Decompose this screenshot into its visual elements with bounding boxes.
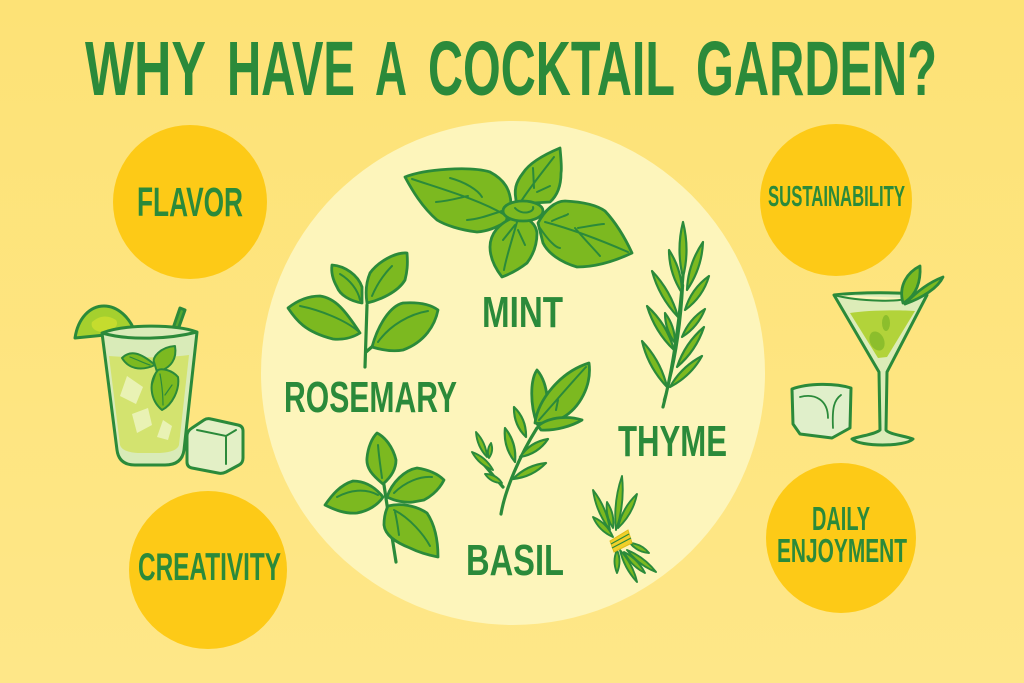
glass (102, 326, 197, 465)
title: WHY (85, 26, 206, 112)
icon: centre herb sprig (472, 363, 589, 514)
badge: sustainability (760, 124, 912, 276)
icon: rosemary sprig (642, 222, 709, 407)
title (85, 26, 937, 112)
badge: daily enjoyment: ENJOYMENT (777, 532, 907, 569)
badge: sustainability: SUSTAINABILITY (768, 181, 905, 213)
label: rosemary: ROSEMARY (284, 373, 457, 422)
icon: tied herb bundle (593, 476, 656, 582)
title: A (375, 26, 407, 112)
panel: central herb circle (261, 121, 765, 625)
badge: daily enjoyment: DAILY (812, 500, 870, 537)
icon: mint sprig (405, 148, 632, 277)
lime wedge (75, 306, 135, 338)
label: thyme: THYME (618, 417, 727, 466)
icon: mojito glass with lime and ice (75, 306, 243, 473)
glass rim (102, 332, 197, 338)
ice cube (792, 384, 851, 438)
icon: rosemary-labelled herb (288, 253, 438, 367)
label: mint: MINT (482, 288, 563, 337)
martini liquid (850, 310, 915, 358)
title: COCKTAIL (428, 26, 675, 112)
straw (170, 308, 185, 338)
garnish leaves (902, 266, 920, 303)
liquid (109, 355, 189, 453)
badge: creativity: CREATIVITY (138, 546, 281, 589)
badge: daily enjoyment (766, 463, 916, 613)
martini glass (834, 293, 927, 445)
mint garnish (122, 346, 178, 410)
badge: creativity (129, 491, 287, 649)
title: HAVE (227, 26, 355, 112)
badge: flavor: FLAVOR (137, 179, 243, 225)
icon: basil plant (325, 433, 444, 562)
ice cube (187, 419, 243, 473)
ice in glass (120, 376, 172, 440)
label: basil: BASIL (466, 536, 564, 585)
icon: martini glass with ice (792, 266, 943, 445)
martini rim (834, 295, 905, 301)
badge: flavor (113, 125, 267, 279)
